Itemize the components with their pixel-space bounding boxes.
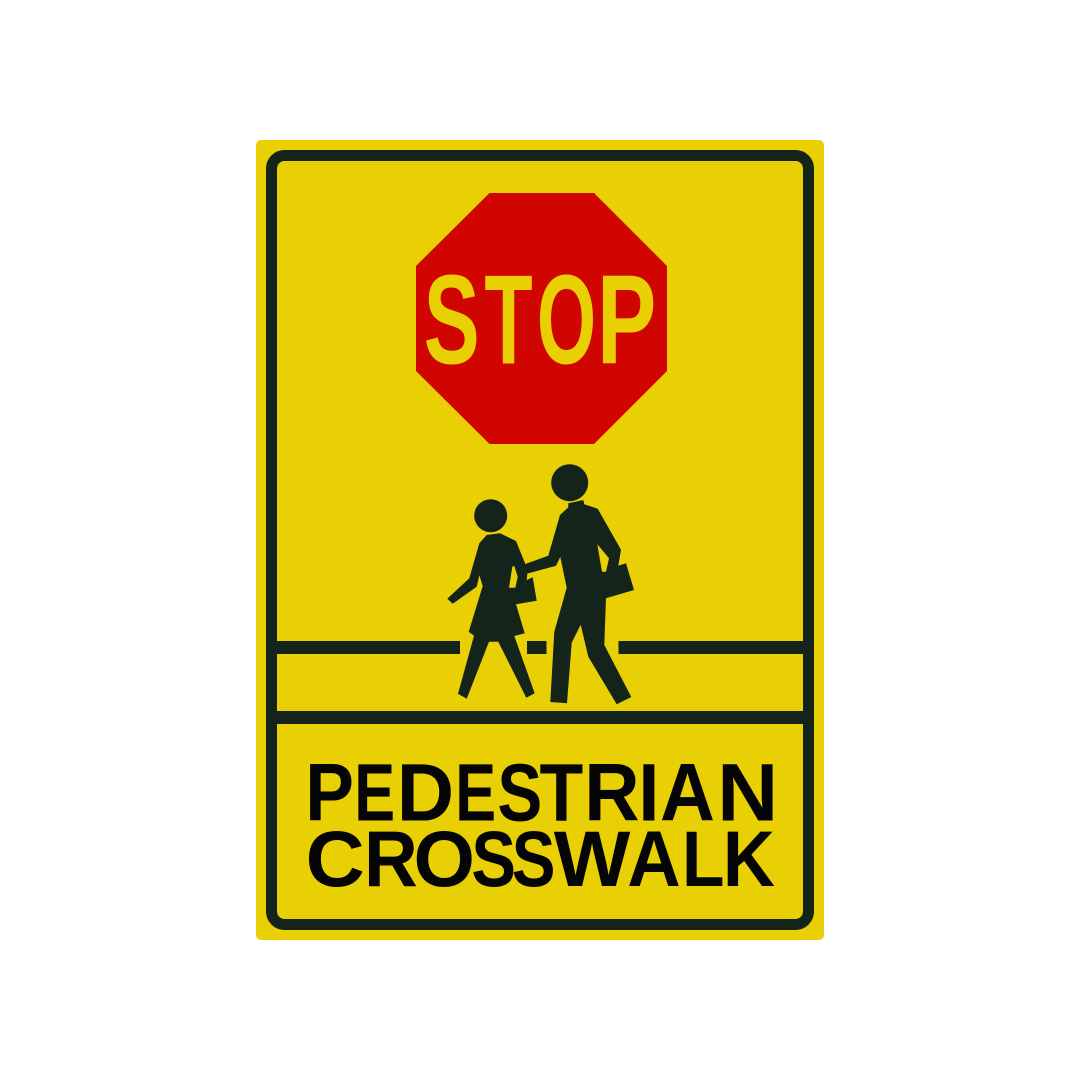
stop text: S xyxy=(424,249,480,391)
heading: crosswalk: K xyxy=(723,816,775,904)
crossing line: lower xyxy=(277,711,803,724)
icon: adult pedestrian with bag xyxy=(525,464,634,704)
heading: crosswalk xyxy=(306,814,775,904)
heading: pedestrian: P xyxy=(305,748,354,839)
heading: crosswalk: S xyxy=(512,815,556,903)
heading: pedestrian: N xyxy=(717,747,778,838)
icon: red stop octagon with text xyxy=(416,193,667,444)
heading: pedestrian: I xyxy=(638,747,659,838)
crossing line: upper, with gaps xyxy=(277,641,803,654)
heading: pedestrian: E xyxy=(354,748,395,839)
sign panel: yellow background xyxy=(256,140,824,940)
heading: pedestrian: T xyxy=(540,748,583,839)
stop text xyxy=(424,249,656,391)
heading: crosswalk: S xyxy=(471,815,516,903)
stop text: O xyxy=(537,250,596,391)
heading: pedestrian xyxy=(305,747,778,839)
heading: crosswalk: W xyxy=(554,815,631,903)
sign border xyxy=(272,156,808,924)
heading: pedestrian: R xyxy=(584,747,640,838)
icon: child pedestrian with bag xyxy=(447,499,537,699)
heading: crosswalk: C xyxy=(306,815,365,904)
stop text: T xyxy=(484,249,533,391)
heading: crosswalk: A xyxy=(627,816,681,903)
heading: pedestrian: S xyxy=(497,747,542,838)
heading: crosswalk: O xyxy=(414,814,475,903)
heading: pedestrian: E xyxy=(455,748,496,839)
heading: pedestrian: A xyxy=(660,747,715,838)
heading: pedestrian: D xyxy=(397,748,454,839)
heading: crosswalk: R xyxy=(364,815,418,903)
stop text: P xyxy=(597,250,656,391)
heading: crosswalk: L xyxy=(682,815,724,903)
